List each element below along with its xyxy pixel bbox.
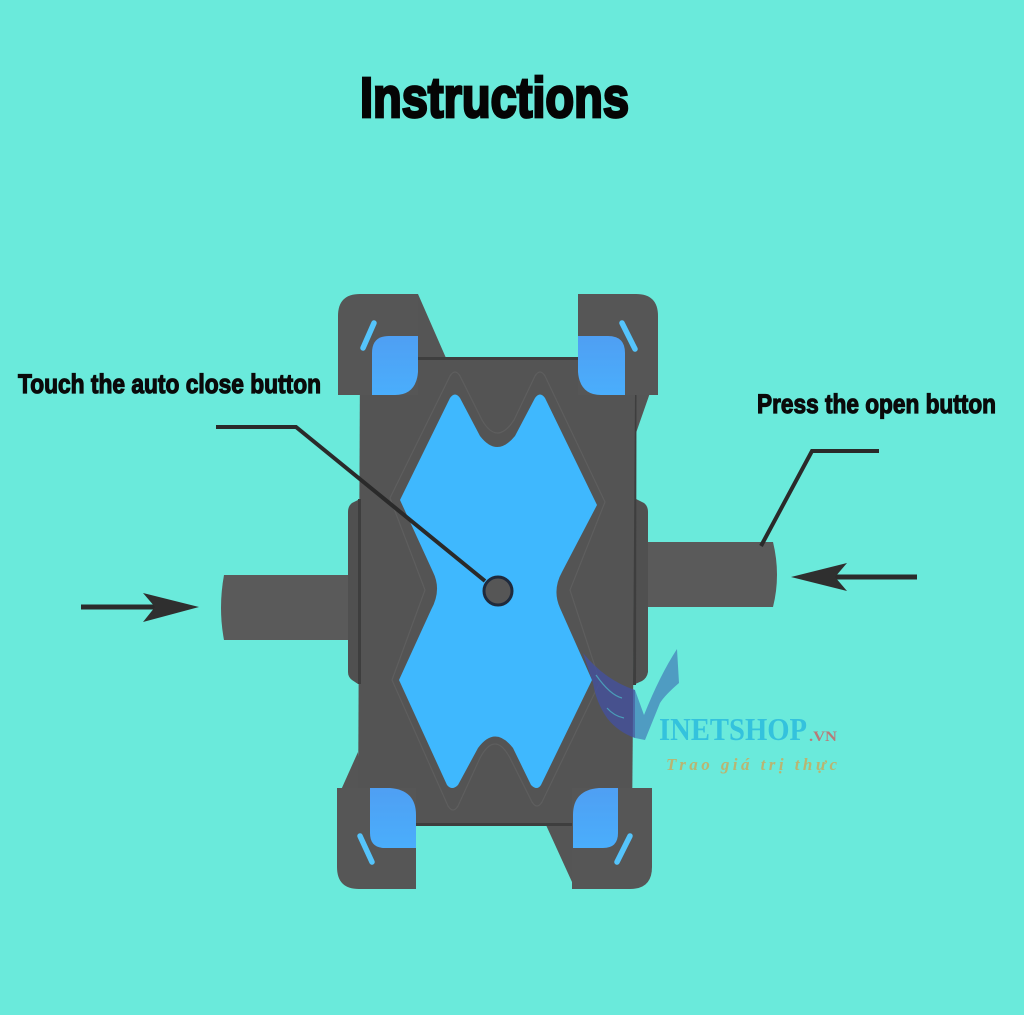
auto close button: [484, 577, 512, 605]
leader line: open button: [761, 451, 879, 546]
pad: [578, 336, 625, 395]
tagline: Trao giá trị thực: [666, 755, 837, 774]
clamp: top right: [578, 294, 658, 395]
logo mark: [583, 649, 679, 740]
left handlebar: [221, 575, 350, 640]
title: Instructions: [360, 66, 629, 130]
lower right brace: [546, 825, 580, 882]
groove outline: [390, 372, 605, 810]
label: touch the auto close button: Touch the auto close button: [18, 369, 321, 399]
side tab: left: [348, 499, 360, 684]
indicator: [363, 323, 374, 348]
indicator: [360, 836, 372, 862]
arrow: right push: [791, 563, 917, 591]
holder body: [358, 357, 636, 826]
domain: .VN: [809, 729, 837, 745]
leader line: auto close button: [216, 427, 485, 581]
watermark logo: [583, 649, 837, 774]
shop name: INETSHOP: [659, 711, 807, 747]
pad: [372, 336, 418, 395]
left wing: [583, 653, 635, 738]
clamp: bottom right: [572, 788, 652, 889]
right handlebar: [646, 542, 777, 607]
upper right brace: [630, 390, 651, 433]
upper left brace: [400, 294, 446, 358]
clamp: top left: [338, 294, 418, 395]
clamp: bottom left: [337, 788, 416, 889]
side tab: right: [633, 499, 648, 685]
indicator: [622, 323, 635, 349]
phone holder: [337, 294, 658, 889]
blue centre panel: [399, 394, 597, 788]
indicator: [617, 836, 630, 862]
lower left brace: [341, 752, 362, 790]
right wing: [635, 649, 679, 740]
body edge shading: [358, 357, 636, 826]
wing streaks: [596, 675, 624, 718]
arrow: left push: [81, 593, 199, 622]
pad: [573, 788, 618, 848]
pad: [370, 788, 416, 848]
